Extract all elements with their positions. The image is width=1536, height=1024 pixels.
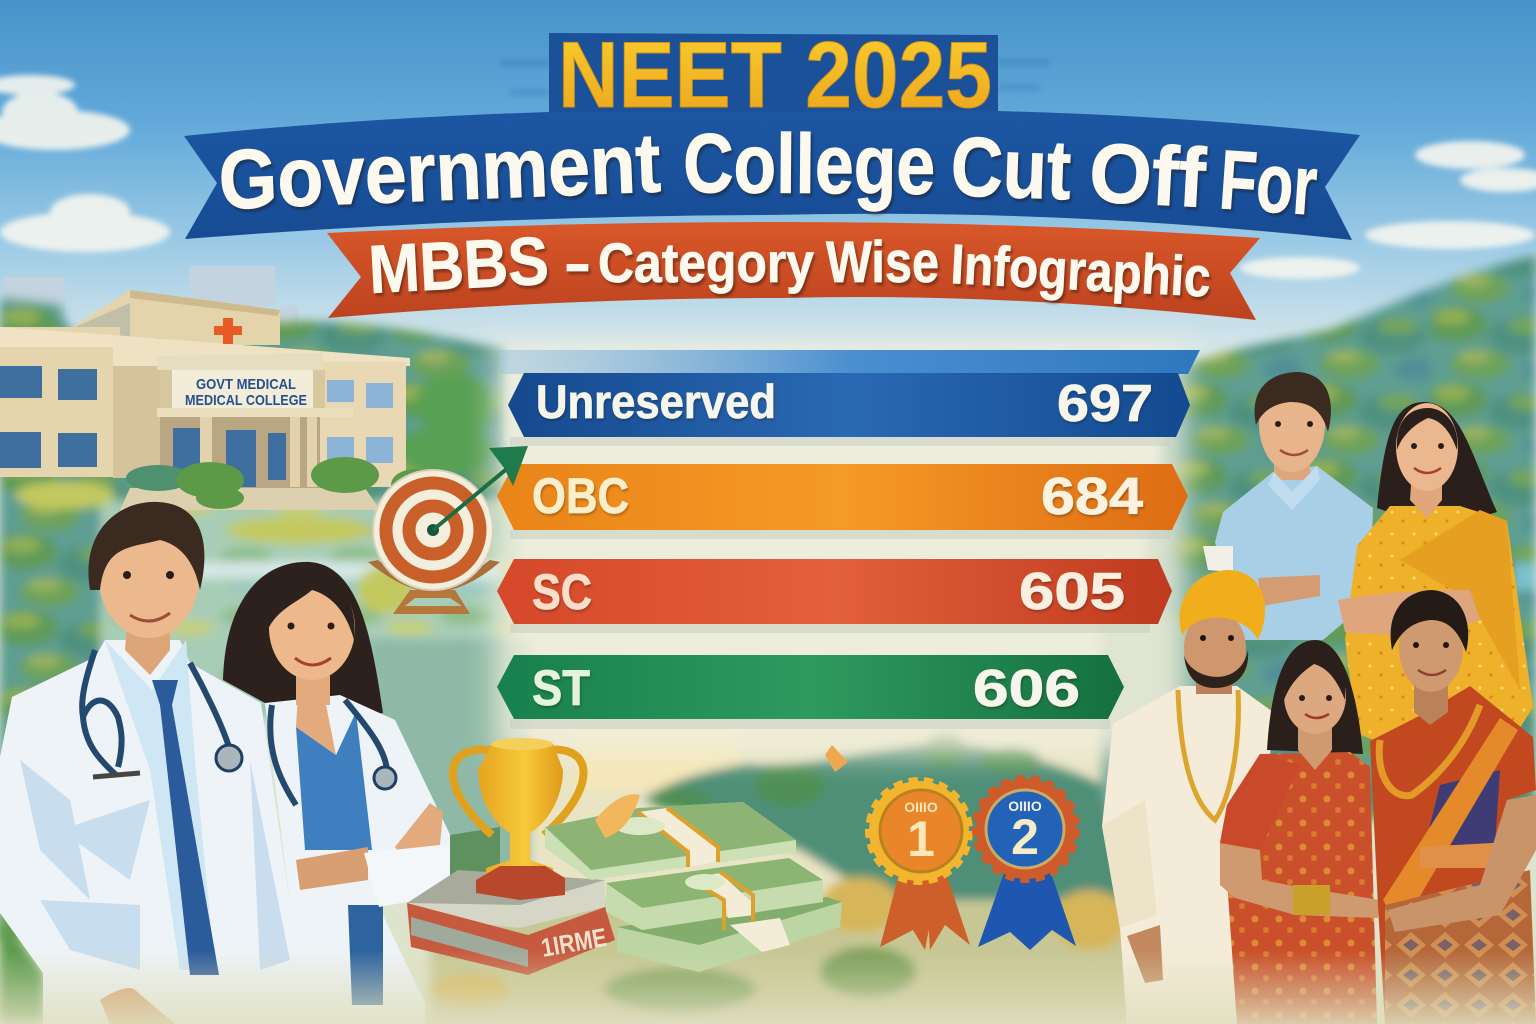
title banner: Government College Cut Off For: Off bbox=[1087, 125, 1209, 225]
title banner: Government College Cut Off For: Cut bbox=[949, 119, 1073, 217]
bar: OBC 684: OBC bbox=[532, 468, 629, 524]
bottom fade over the figures bbox=[0, 950, 1536, 1024]
icon: medal ribbon 2 bbox=[976, 779, 1076, 950]
subtitle banner: MBBS - Category Wise Infographic bbox=[327, 222, 1260, 320]
hospital sign: GOVT MEDICAL bbox=[196, 376, 296, 393]
background: clouds bbox=[0, 75, 1536, 279]
doctor: female bbox=[223, 562, 456, 1024]
bar: Unreserved 697 bbox=[508, 373, 1190, 437]
title banner: Government College Cut Off For: College bbox=[683, 116, 936, 212]
cut off chart bbox=[497, 350, 1200, 729]
person: woman in yellow saree bbox=[1338, 402, 1533, 760]
subtitle banner: MBBS - Category Wise Infographic: - bbox=[564, 231, 591, 294]
subtitle banner: MBBS - Category Wise Infographic: MBBS bbox=[367, 223, 551, 308]
background: haze behind bars bbox=[495, 345, 1185, 755]
icon: stacks of money bbox=[545, 745, 848, 972]
bar: OBC 684: 684 bbox=[1041, 468, 1143, 526]
icon: target with arrow bbox=[368, 446, 528, 614]
icon: medal ribbon 2: 2 bbox=[1011, 809, 1039, 865]
person: man with yellow turban bbox=[1102, 570, 1273, 1024]
bar: ST 606 bbox=[497, 655, 1124, 719]
bar: SC 605: 605 bbox=[1019, 563, 1125, 621]
bar: SC 605 bbox=[497, 559, 1172, 624]
person: man in blue shirt bbox=[1203, 372, 1373, 640]
bar: OBC 684 bbox=[497, 464, 1188, 530]
doctor: male bbox=[0, 502, 305, 1024]
bar: Unreserved 697: 697 bbox=[1057, 375, 1153, 433]
subtitle banner: MBBS - Category Wise Infographic: Category bbox=[598, 231, 814, 294]
background: lower landscape bbox=[0, 620, 1200, 1024]
subtitle banner: MBBS - Category Wise Infographic: Infographic bbox=[949, 232, 1212, 309]
bar: ST 606: 606 bbox=[973, 660, 1080, 718]
hospital building bbox=[0, 290, 439, 510]
icon: trophy bbox=[453, 738, 584, 900]
hospital sign bbox=[172, 370, 313, 409]
title banner: Government College Cut Off For bbox=[184, 111, 1360, 240]
bar: SC 605: SC bbox=[532, 564, 592, 620]
bar: ST 606: ST bbox=[532, 660, 590, 716]
icon: books: 1IRME bbox=[539, 922, 609, 963]
background: hills with trees bbox=[0, 255, 1536, 940]
icon: medal ribbon 1: 1 bbox=[907, 811, 935, 867]
icon: books bbox=[407, 827, 615, 975]
title: NEET 2025: NEET 2025 bbox=[558, 22, 992, 127]
hospital sign: MEDICAL COLLEGE bbox=[185, 392, 307, 409]
icon: medal ribbon 2: OIIIO bbox=[1008, 798, 1042, 814]
subtitle banner: MBBS - Category Wise Infographic: Wise bbox=[826, 230, 939, 295]
icon: medal ribbon 1 bbox=[869, 781, 970, 950]
bar: Unreserved 697: Unreserved bbox=[536, 375, 776, 428]
title banner: Government College Cut Off For: Government bbox=[217, 115, 662, 227]
title banner: Government College Cut Off For: For bbox=[1217, 132, 1320, 233]
person: woman in red saree bbox=[1220, 640, 1380, 1024]
icon: medal ribbon 1: OIIIO bbox=[904, 799, 938, 815]
person: man in orange festive dress bbox=[1370, 590, 1536, 1024]
background: distant buildings bbox=[3, 266, 298, 326]
icon: red cross bbox=[214, 318, 242, 344]
